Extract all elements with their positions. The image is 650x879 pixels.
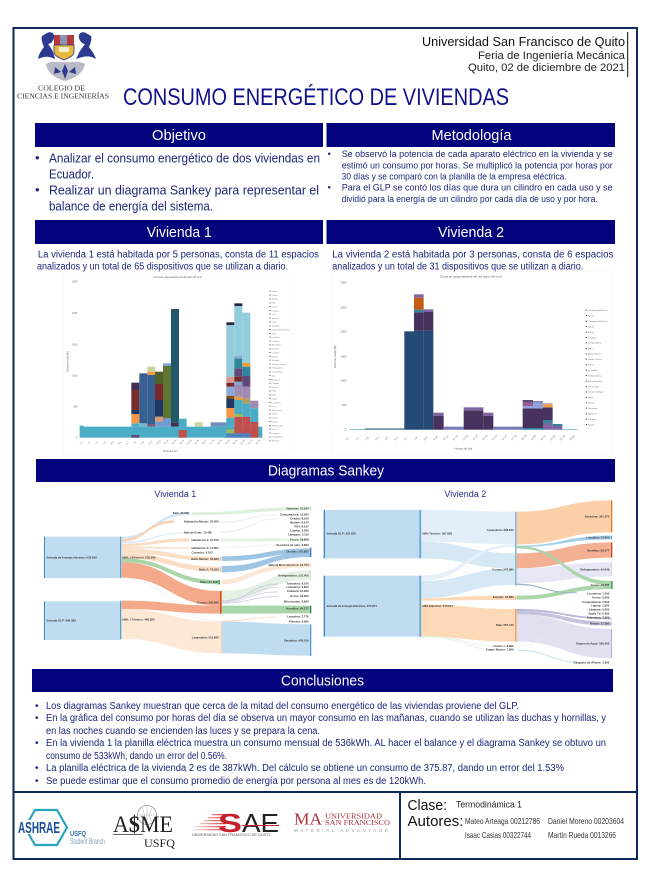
logo: MA xyxy=(294,810,391,833)
x axis labels: 19-20 xyxy=(530,433,538,441)
text: metodología bullets: • xyxy=(328,182,331,194)
x axis labels: 15-16 xyxy=(491,433,499,441)
source nodes xyxy=(324,510,421,637)
legend: Comedor xyxy=(272,383,280,385)
sankey: vivienda 2: Router: 17.280 xyxy=(590,621,610,625)
legend: Focos xyxy=(272,406,277,408)
logo: ASME: USFQ xyxy=(144,836,175,850)
x axis labels: 20-21 xyxy=(233,439,239,445)
text: objetivo bullets: Realizar un diagrama Sankey para representar el xyxy=(49,182,319,198)
legend: Licuadora xyxy=(588,369,598,372)
heading: Metodología: Metodología xyxy=(432,127,512,144)
university header text: Universidad San Francisco de Quito xyxy=(422,34,625,49)
logo: ASME: A$ME xyxy=(113,812,173,837)
x axis labels: 21-22 xyxy=(240,439,246,445)
node bars xyxy=(515,500,613,658)
text: conclusiones bullets: consumo de 533kWh, dando un error del 0.56%. xyxy=(46,751,227,762)
logo: ASME xyxy=(113,806,175,850)
university header text: Feria de Ingeniería Mecánica xyxy=(478,50,626,62)
legend: Focos xyxy=(272,429,277,431)
x axis labels: 3-4 xyxy=(374,435,380,441)
chart: curva de carga vivienda 1: 2500 xyxy=(72,282,78,284)
sankey: vivienda 1: Modem: 8.670 xyxy=(290,520,309,524)
legend: Celular xyxy=(272,295,278,297)
x axis labels: 1-2 xyxy=(88,441,92,445)
labels: Entrada GLP: 496.383 xyxy=(47,619,76,623)
chart: curva de carga vivienda 1: 2000 xyxy=(72,313,78,315)
labels: Entrada de Energía eléctrica: 533.509 xyxy=(47,556,97,560)
text: metodología bullets: 30 días y se comparó con la planilla de la empresa eléctrica. xyxy=(342,172,567,182)
x axis labels: 11-12 xyxy=(452,434,459,441)
legend: Secadora de pelo xyxy=(272,364,286,366)
legend: Modem xyxy=(272,299,278,301)
x axis labels: 15-16 xyxy=(194,439,200,445)
text: vivienda 2 description: analizados y un total de 31 dispositivos que se utilizan a diario. xyxy=(332,262,583,272)
heading: Vivienda 2: Vivienda 2 xyxy=(438,224,504,241)
text: conclusiones bullets: • xyxy=(35,776,39,787)
sankey: vivienda 1: Microondas: 9.660 xyxy=(284,599,309,603)
sankey: vivienda 1: PS4: 8.017 xyxy=(295,524,309,528)
sankey: vivienda 2: Computadora: 5.000 xyxy=(582,600,610,604)
text: metodología bullets: dividió para la energía de un cilindro por cada día de uso y por hora. xyxy=(342,194,598,205)
legend: Celular xyxy=(272,418,278,420)
sankey: vivienda 1: Celular: 8.100 xyxy=(290,516,309,520)
text: conclusiones bullets: La planilla eléctrica de la vivienda 2 es de 387kWh. Del cálculo se obtiene un consumo de 375.87, dando un error del 1.53% xyxy=(46,763,564,774)
sankey: vivienda 2: Secadora: 301.370 xyxy=(585,514,610,518)
x axis labels: 16-17 xyxy=(500,433,508,441)
sankey: vivienda 1: Focos: 29.859 xyxy=(290,537,309,541)
sankey: vivienda 2: Sala: 267.240 xyxy=(496,623,514,627)
x axis labels: 8-9 xyxy=(141,441,145,445)
sankey: vivienda 2: Cargador de iPhone: 1.800 xyxy=(574,660,610,664)
node bars xyxy=(218,507,311,656)
x axis labels: 23-24 xyxy=(568,433,576,441)
sankey: vivienda 1: Batería Moto Eléctrica: 24.750 xyxy=(269,563,309,567)
legend: Sala xyxy=(272,375,276,377)
text: objetivo bullets: • xyxy=(35,150,40,165)
text: conclusiones bullets: • xyxy=(35,713,39,724)
sankey: vivienda 2: Televisión: 7.650 xyxy=(587,616,610,620)
sankey: vivienda 1: Lavadora: 7.776 xyxy=(287,615,309,619)
sankey: vivienda 2: Laptop: 1.800 xyxy=(591,604,610,608)
text: vivienda 1 description xyxy=(37,250,319,272)
legend: Televisión xyxy=(272,441,280,443)
legend: Refrigeradora xyxy=(588,374,602,377)
legend: Lavandería xyxy=(272,402,282,404)
labels: Entrada GLP: 267.828 xyxy=(327,532,356,536)
x axis labels: 10-11 xyxy=(156,439,162,445)
x axis labels: 17-18 xyxy=(510,433,518,441)
heading: Diagramas Sankey xyxy=(36,459,615,482)
text: vivienda 2 description xyxy=(332,250,613,272)
sankey: vivienda 2: Estudio: 25.880 xyxy=(493,595,514,599)
sankey: vivienda 1: Cocina: 295.880 xyxy=(197,600,219,604)
sankey: vivienda 1: Habitación Master: 20.000 xyxy=(184,520,219,524)
heading: Objetivo: Objetivo xyxy=(152,127,206,144)
text: clase y autores: Isaac Casias 00322744 xyxy=(465,830,531,840)
chart: curva de carga vivienda 1 xyxy=(63,273,293,455)
legend: Apple Router xyxy=(588,353,601,356)
text: conclusiones bullets: • xyxy=(35,738,39,749)
text: conclusiones bullets: en las noches cuando se encienden las luces y se prepara la cena. xyxy=(46,726,320,737)
x axis labels xyxy=(345,433,576,441)
legend: Lavadora xyxy=(272,352,280,354)
text: vivienda 1 description: La vivienda 1 está habitada por 5 personas, consta de 11 espacios xyxy=(38,250,319,260)
sankey: vivienda 1: Secadora: 405.019 xyxy=(284,638,309,642)
logo: SAE: UNIVERSIDAD SAN FRANCISCO DE QUITO xyxy=(192,833,270,837)
sankey: vivienda 1: Plancha: 8.060 xyxy=(289,619,309,623)
sankey: vivienda 2: Vivienda 2 xyxy=(444,489,486,499)
sankey: vivienda 2: Lámpara: 0.600 xyxy=(589,608,610,612)
legend: Baño xyxy=(272,394,276,397)
x axis labels: 5-6 xyxy=(118,441,123,445)
text: conclusiones bullets: Se puede estimar que el consumo promedio de energía por persona al mes es de 120kWh. xyxy=(46,776,426,787)
logo: MA: MA xyxy=(294,810,322,828)
sankey: vivienda 1: Patio: 27.128 xyxy=(200,580,218,584)
logo: ASHRAE xyxy=(18,810,105,846)
x axis labels: 17-18 xyxy=(210,439,216,445)
legend: Router xyxy=(588,423,595,426)
x axis labels: 13-14 xyxy=(471,433,479,441)
sankey: vivienda 2: Horno: 5.600 xyxy=(592,596,610,600)
x axis labels: 23-24 xyxy=(256,439,262,445)
x axis labels: 1-2 xyxy=(355,435,360,441)
sankey: vivienda 1: Refrigeradora: 131.400 xyxy=(278,573,309,577)
legend xyxy=(586,309,608,426)
x axis labels: 14-15 xyxy=(187,439,193,445)
sankey: vivienda 1: Televisor: 31.347 xyxy=(286,506,309,510)
text: conclusiones bullets: En la vivienda 1 la planilla eléctrica muestra un consumo mensual de 536kWh. AL hacer el balance y el diagrama Sankey se obtuvo un xyxy=(46,738,606,749)
x axis labels: 0-1 xyxy=(80,441,84,445)
sankey: vivienda 1: Baño Master: 50.808 xyxy=(191,557,219,561)
sankey: vivienda 2: Focos: 48.085 xyxy=(591,583,610,587)
legend: Hornillas xyxy=(272,349,279,351)
legend: Sala de estar xyxy=(272,409,283,412)
x axis labels: 6-7 xyxy=(403,435,409,441)
heading: Diagramas Sankey: Diagramas Sankey xyxy=(268,462,384,480)
logo: ASHRAE: Student Branch xyxy=(70,837,105,846)
sankey: vivienda 1 xyxy=(44,489,311,656)
legend: Router xyxy=(272,290,278,293)
logo: ASHRAE: ASHRAE xyxy=(18,820,60,837)
x axis labels: 5-6 xyxy=(393,435,399,441)
text: conclusiones bullets xyxy=(35,701,606,787)
legend: PS4 xyxy=(272,303,275,305)
x axis labels: 9-10 xyxy=(149,440,154,445)
legend: Laptop xyxy=(272,420,277,423)
sankey: vivienda 1: Vivienda 1 xyxy=(154,489,196,499)
x axis labels: 2-3 xyxy=(364,435,370,441)
legend: Focos Estudio xyxy=(588,380,602,383)
university header text xyxy=(422,32,628,77)
labels: kWh_t Térmico: 496.383 xyxy=(122,618,155,622)
sankey: vivienda 1: Baño 2: 73.200 xyxy=(199,567,219,571)
chart: curva de carga vivienda 1: Potencia media [W] xyxy=(67,351,70,372)
logo: Colegio de Ciencias e Ingenierías: COLEGIO DE xyxy=(38,84,85,92)
text: clase y autores: Autores: xyxy=(408,813,464,830)
text: conclusiones bullets: • xyxy=(35,701,39,712)
heading: Conclusiones: Conclusiones xyxy=(281,672,364,690)
legend: Focos Sala xyxy=(588,386,600,388)
legend: Apple TV xyxy=(588,413,597,416)
legend: Computadora xyxy=(588,342,602,345)
flows to devices xyxy=(192,507,310,656)
text: clase y autores: Mateo Arteaga 00212786 xyxy=(465,816,540,826)
sankey: vivienda 1: Lámpara: 5.110 xyxy=(288,533,309,537)
x axis labels: 6-7 xyxy=(126,441,130,445)
sankey: vivienda 1: Licuadora: 3.600 xyxy=(286,585,309,589)
legend: Lámpara xyxy=(272,310,280,312)
legend: Ducha xyxy=(272,322,278,324)
chart: curva de carga vivienda 1: 1500 xyxy=(72,344,78,346)
heading: Conclusiones xyxy=(32,669,613,692)
legend: Router xyxy=(588,402,595,405)
sankey: vivienda 2: Cuarto 1: 6.996 xyxy=(493,644,514,648)
sankey: vivienda 1: Duchas: 101.887 xyxy=(286,550,309,554)
legend: Focos xyxy=(588,332,594,334)
x axis labels: 7-8 xyxy=(413,435,419,441)
sankey: vivienda 1: Habitación 3: 14.801 xyxy=(191,546,219,550)
x axis labels: 8-9 xyxy=(423,435,428,441)
chart: curva de carga vivienda 2: 2000 xyxy=(340,330,347,334)
text: objetivo bullets xyxy=(35,150,320,214)
legend: Televisor xyxy=(272,318,279,320)
text: clase y autores: Martín Rueda 0013266 xyxy=(548,830,616,840)
chart: curva de carga vivienda 2: Potencia media [W] xyxy=(333,345,337,368)
logo: SAE: AE xyxy=(242,808,279,838)
text: conclusiones bullets: En la gráfica del consumo por horas del día se observa un mayor consumo en las mañanas, cuando se utilizan las duchas y hornillas, y xyxy=(46,713,606,724)
logo: MA: MATERIAL ADVANTAGE xyxy=(294,828,390,833)
flows to rooms xyxy=(421,510,515,650)
text: conclusiones bullets: Los diagramas Sankey muestran que cerca de la mitad del consumo energético de las viviendas proviene del GLP. xyxy=(46,701,519,712)
sankey: vivienda 2: Refrigeradora: 94.848 xyxy=(580,568,610,572)
sankey: vivienda 1: Sala: 35.860 xyxy=(173,511,189,515)
x axis labels: 14-15 xyxy=(481,433,489,441)
x axis labels: 12-13 xyxy=(462,433,470,441)
stacked bars xyxy=(80,303,262,438)
sankey: vivienda 1: Computadora: 16.000 xyxy=(280,512,309,516)
text: clase y autores: Termodinámica 1 xyxy=(456,800,522,810)
text: clase y autores xyxy=(408,797,624,840)
legend: Computadora xyxy=(272,371,284,374)
x axis labels: 20-21 xyxy=(539,433,547,441)
x axis labels: 7-8 xyxy=(133,441,138,445)
legend: Router xyxy=(588,325,595,328)
chart: curva de carga vivienda 2: 3000 xyxy=(340,281,347,285)
legend: Patio xyxy=(272,390,276,393)
legend: Computadora xyxy=(272,436,284,439)
heading: Vivienda 2 xyxy=(326,220,615,244)
legend: Cafetera xyxy=(272,340,280,343)
footer dividers xyxy=(13,791,637,859)
logo: ASHRAE: USFQ xyxy=(70,831,86,838)
logo: MA: UNIVERSIDAD xyxy=(325,812,383,820)
legend: Plancha xyxy=(272,356,279,358)
legend: MR/T xyxy=(588,348,594,350)
legend: Router xyxy=(588,314,595,317)
chart: curva de carga vivienda 1: 500 xyxy=(73,407,78,409)
legend: Cocina xyxy=(272,387,278,389)
x axis labels: 11-12 xyxy=(164,439,170,445)
heading: Vivienda 1: Vivienda 1 xyxy=(147,224,212,241)
x axis labels: 22-23 xyxy=(248,439,254,445)
legend: Refrigeradora xyxy=(272,368,284,370)
x axis labels: 21-22 xyxy=(549,433,557,441)
legend: Microondas xyxy=(272,345,281,347)
legend: Cargador de iPhone xyxy=(588,309,608,312)
x axis labels: 22-23 xyxy=(559,433,567,441)
text: metodología bullets xyxy=(328,149,613,205)
logo: SAE: S xyxy=(218,808,242,838)
legend: Licuadora xyxy=(272,337,281,339)
icon: crest xyxy=(38,32,96,81)
logo: MA: SAN FRANCISCO xyxy=(325,818,391,827)
x axis labels: 10-11 xyxy=(442,434,450,441)
labels: Entrada de Energía Eléctrica: 375.871 xyxy=(327,604,377,608)
sankey: vivienda 2: Hornillas: 89.277 xyxy=(587,548,610,552)
chart: curva de carga vivienda 2 xyxy=(332,272,612,455)
chart: curva de carga vivienda 2: 0 xyxy=(345,428,347,432)
text: metodología bullets: Para el GLP se contó los días que dura un cilindro en cada uso y se xyxy=(342,182,613,194)
text: metodología bullets: • xyxy=(328,149,331,160)
sankey: vivienda 2: Cuarto Master: 1.800 xyxy=(486,648,514,652)
flows to devices xyxy=(517,500,612,663)
text: metodología bullets: estimó un consumo por horas. Se multiplicó la potencia por horas por xyxy=(342,160,613,172)
text: vivienda 2 description: La vivienda 2 está habitada por 3 personas, consta de 6 espacios xyxy=(332,250,613,260)
sankey: vivienda 2: Tanque de Agua: 180.000 xyxy=(576,642,610,646)
heading: Objetivo xyxy=(35,123,323,147)
text: clase y autores: Daniel Moreno 00203604 xyxy=(548,816,624,826)
chart: curva de carga vivienda 2: 2500 xyxy=(340,305,347,309)
x axis labels: 12-13 xyxy=(172,439,178,445)
legend: Tanque de Agua xyxy=(588,391,604,394)
labels xyxy=(47,556,156,623)
x axis labels: 3-4 xyxy=(103,441,107,445)
logo: Colegio de Ciencias e Ingenierías: CIENCIAS E INGENIERÍAS xyxy=(17,90,109,100)
chart: curva de carga vivienda 2: 1000 xyxy=(340,379,347,383)
legend xyxy=(269,290,291,443)
legend: Baño 2 xyxy=(272,397,277,400)
x axis labels: 19-20 xyxy=(225,439,231,445)
sankey: vivienda 1: Habitación 2: 24.706 xyxy=(191,538,219,542)
sankey: vivienda 2: Licuadora: 1.500 xyxy=(587,591,610,595)
legend: Cargador de iPhone xyxy=(588,320,608,323)
legend: Lámpara xyxy=(272,433,280,435)
logo: Colegio de Ciencias e Ingenierías xyxy=(17,32,109,100)
legend: Tostadora xyxy=(272,325,281,328)
text: conclusiones bullets: • xyxy=(35,763,39,774)
sankey: vivienda 1: Hornillas: 84.277 xyxy=(286,607,309,611)
flows to rooms xyxy=(122,512,220,653)
heading: Metodología xyxy=(326,123,615,147)
sankey: vivienda 2: Lavandería: 328.870 xyxy=(487,528,514,532)
legend: Habitación xyxy=(272,378,280,381)
x axis labels: 13-14 xyxy=(179,439,185,445)
logo: SAE xyxy=(192,808,279,838)
legend: Batería Moto Eléctrica xyxy=(272,328,291,331)
text: objetivo bullets: Ecuador. xyxy=(49,166,94,182)
chart: curva de carga vivienda 1: 0 xyxy=(76,438,78,440)
labels xyxy=(327,532,453,608)
x axis labels: 18-19 xyxy=(520,433,528,441)
legend: Router xyxy=(272,413,278,416)
sankey: vivienda 2: Cocina: 247.980 xyxy=(492,568,514,572)
sankey: vivienda 1: Lavandería: 510.840 xyxy=(192,635,219,639)
university header text: Quito, 02 de diciembre de 2021 xyxy=(468,62,625,74)
legend: Horno xyxy=(588,364,595,367)
x axis labels: 4-5 xyxy=(384,435,389,441)
sankey: vivienda 1: Cafetera: 10.000 xyxy=(287,589,309,593)
legend: Lámpara xyxy=(588,336,597,339)
chart: curva de carga vivienda 1: Curva de carga eléctrica del día típico (W vs h) xyxy=(153,276,202,279)
x axis labels: 0-1 xyxy=(345,435,351,441)
chart: curva de carga vivienda 1: 1000 xyxy=(72,375,78,377)
sankey: vivienda 1: Comedor: 4.102 xyxy=(191,551,213,555)
x axis labels: 16-17 xyxy=(202,439,208,445)
legend: Horno xyxy=(272,333,277,335)
labels: kWh_t Eléctrico: 533.509 xyxy=(122,556,156,560)
legend: Televisión xyxy=(588,408,598,410)
x axis labels: 4-5 xyxy=(111,441,115,445)
sankey: vivienda 1: Tostadora: 8.100 xyxy=(286,581,309,585)
chart: curva de carga vivienda 1: Horas del día xyxy=(163,450,178,453)
text: objetivo bullets: • xyxy=(35,182,40,197)
sankey: vivienda 1: Secadora de pelo: 6.693 xyxy=(276,543,309,547)
legend: Focos xyxy=(272,314,277,316)
x axis labels: 18-19 xyxy=(217,439,223,445)
x axis labels: 2-3 xyxy=(95,441,100,445)
text: vivienda 1 description: analizados y un total de 65 dispositivos que se utilizan a diario. xyxy=(37,262,288,272)
text: objetivo bullets: Analizar el consumo energético de dos viviendas en xyxy=(49,150,320,166)
chart: curva de carga vivienda 2: Horas del día xyxy=(454,446,473,450)
legend: Lámpara xyxy=(588,418,597,421)
legend: Secadora xyxy=(272,360,280,362)
sankey: vivienda 2: Apple TV: 0.300 xyxy=(588,611,610,615)
heading: Vivienda 1 xyxy=(35,220,323,244)
text: objetivo bullets: balance de energía del sistema. xyxy=(49,198,213,214)
chart: curva de carga vivienda 2: 500 xyxy=(342,403,347,407)
text: clase y autores: Clase: xyxy=(408,797,447,814)
legend: MR/T xyxy=(588,397,594,399)
sankey: vivienda 1: Laptop: 8.200 xyxy=(290,529,309,533)
legend: Router Cuarto xyxy=(588,358,602,361)
chart: curva de carga vivienda 2: Curva de carga eléctrica del día típico (W vs h) xyxy=(440,275,502,279)
sankey: vivienda 2: Lavadora: 13.800 xyxy=(586,536,610,540)
title: CONSUMO ENERGÉTICO DE VIVIENDAS xyxy=(123,84,509,111)
legend: Laptop xyxy=(272,305,277,308)
text: metodología bullets: Se observó la potencia de cada aparato eléctrico en la vivienda y se xyxy=(342,149,613,160)
sankey: vivienda 1: Sala de Estar: 15.460 xyxy=(184,530,212,534)
source nodes xyxy=(44,537,121,640)
x axis labels xyxy=(80,439,262,445)
legend: Televisor Sala xyxy=(272,425,284,427)
sankey: vivienda 2 xyxy=(324,489,613,664)
sankey: vivienda 1: Horno: 28.000 xyxy=(290,594,309,598)
stacked bars xyxy=(350,294,578,430)
labels: kWh Térmico: 267.828 xyxy=(422,532,452,536)
labels: kWh Eléctrico: 375.871 xyxy=(422,604,453,608)
chart: curva de carga vivienda 2: 1500 xyxy=(340,354,347,358)
x axis labels: 9-10 xyxy=(432,434,439,441)
